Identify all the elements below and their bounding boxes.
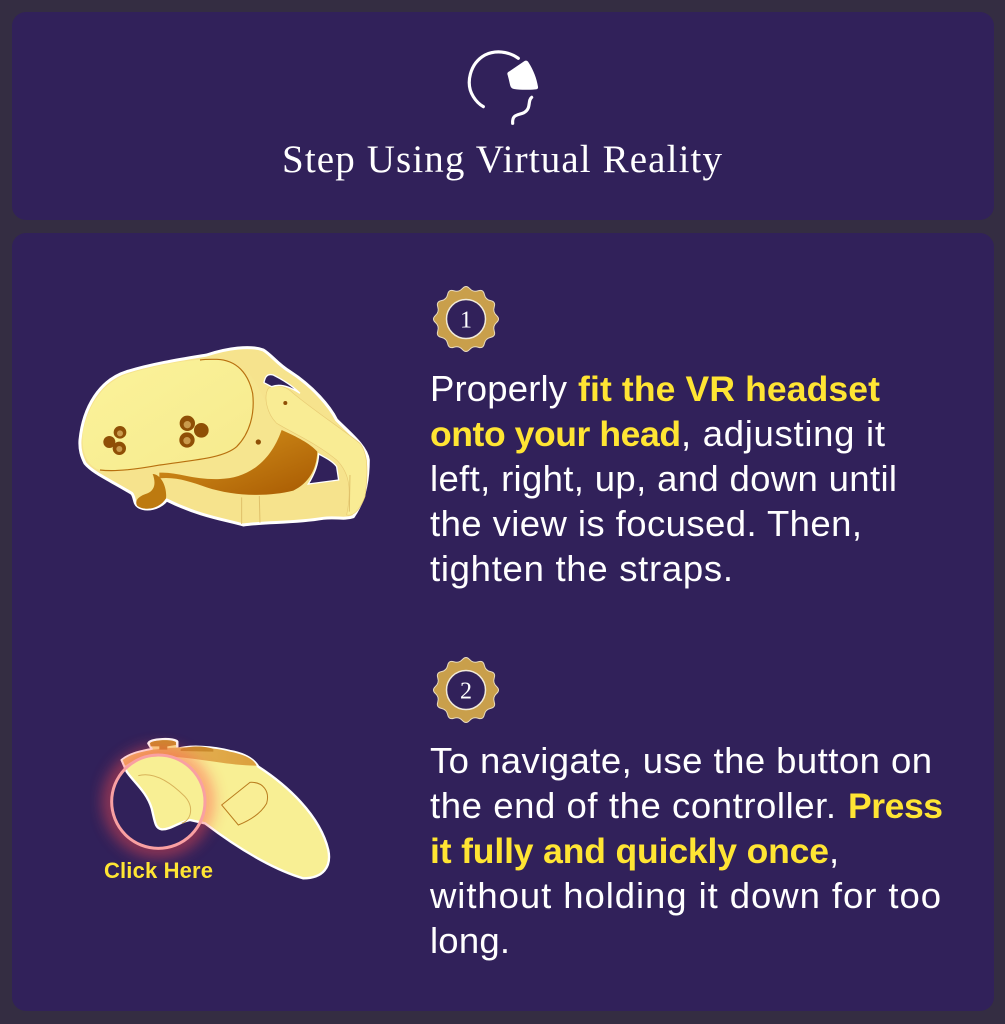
step 2 text: long.: [430, 920, 510, 961]
strap seams: [242, 475, 350, 524]
visor edge line: [100, 359, 253, 471]
panel: header: [12, 12, 994, 220]
step 2 text: [429, 740, 943, 961]
controller body: [122, 739, 329, 878]
step 1 badge: 1: [460, 308, 472, 334]
headset silhouette and straps: [80, 348, 368, 525]
illustration: VR controller with click target: [111, 739, 329, 878]
step 1 text: [430, 368, 897, 589]
side body: [153, 370, 282, 481]
step 1 text: left, right, up, and down until: [430, 458, 897, 499]
dark interior padding: [159, 430, 317, 495]
step 2 text: without holding it down for too: [429, 875, 941, 916]
step 1 text: Properly: [430, 368, 568, 409]
top band: [123, 747, 257, 766]
step 1 text: the view is focused. Then,: [430, 503, 862, 544]
step 1 text: tighten the straps.: [430, 548, 733, 589]
step 1 badge: [433, 286, 499, 352]
step 2 badge: 2: [460, 678, 472, 704]
top buttons: [181, 746, 213, 752]
top dial: [150, 740, 176, 750]
step 1 text: onto your head: [430, 414, 681, 454]
step 2 badge: [433, 657, 499, 723]
sensor clusters: [103, 401, 287, 455]
illustration: VR headset: [80, 348, 368, 525]
step 1 text: fit the VR headset: [578, 369, 880, 409]
thumb pad: [222, 782, 267, 825]
nose piece: [136, 474, 166, 509]
side strap: [266, 386, 367, 515]
panel: steps: [12, 233, 994, 1011]
trigger: [138, 775, 191, 823]
step 2 text: it fully and quickly once: [430, 831, 829, 871]
icon: person wearing VR headset: [469, 52, 538, 123]
step 2 text: ,: [829, 830, 839, 871]
glow: [111, 754, 206, 849]
strap openings: [264, 375, 300, 393]
click here label: Click Here: [104, 858, 213, 883]
front visor: [83, 359, 253, 471]
title: Step Using Virtual Reality: [282, 138, 722, 181]
step 2 text: the end of the controller.: [430, 785, 836, 826]
step 2 text: To navigate, use the button on: [430, 740, 932, 781]
step 1 text: , adjusting it: [681, 413, 885, 454]
step 2 text: Press: [848, 786, 943, 826]
click circle: [112, 755, 205, 848]
